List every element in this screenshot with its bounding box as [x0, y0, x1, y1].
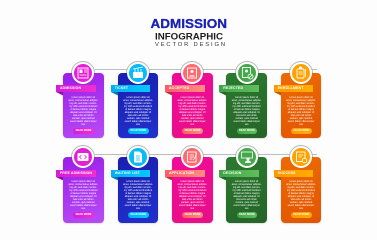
body text: Lorem ipsum dolor sit — [235, 96, 258, 99]
body text: veniam, quis nostrud — [290, 117, 312, 120]
body text: aliquam erat volutpat. Ut — [125, 195, 151, 198]
title: ADMISSION — [150, 16, 227, 31]
body text — [177, 180, 208, 210]
body text: amet, consectetuer adipisc- — [286, 99, 316, 102]
body text — [68, 96, 98, 126]
body text: sus — [190, 123, 194, 126]
body text: exerci tation ullamcorper — [288, 120, 314, 123]
panel: enrollment — [274, 61, 322, 139]
icon: decision — [235, 145, 259, 168]
ribbon label: ACCEPTED — [169, 86, 189, 90]
icon: ticket — [126, 61, 150, 84]
panel: ticket — [111, 61, 158, 139]
button: READ MORE — [293, 213, 309, 216]
body text: my nibh euismod tincidunt — [178, 189, 206, 192]
body text — [232, 96, 262, 126]
body text: aliquam erat volutpat. Ut — [233, 195, 260, 198]
body text: exerci tation ullamcorper — [233, 204, 260, 207]
body text: wisi enim ad minim — [182, 198, 203, 201]
body text: ut laoreet dolore magna — [288, 192, 314, 195]
body text: wisi enim ad minim — [73, 114, 94, 117]
ribbon label: SUCCESS — [278, 170, 296, 174]
body text: wisi enim ad minim — [128, 198, 148, 201]
body text: veniam, quis nostrud — [127, 117, 149, 120]
ribbon label — [56, 170, 96, 177]
body text: exerci tation ullamcorper — [233, 120, 260, 123]
button — [237, 212, 257, 218]
body text: veniam, quis nostrud — [235, 117, 258, 120]
icon: application — [180, 145, 204, 168]
body text: amet, consectetuer adipisc- — [232, 183, 262, 186]
button: READ MORE — [76, 213, 92, 216]
icon: accepted — [180, 61, 204, 84]
body text — [177, 96, 208, 126]
body text: wisi enim ad minim — [128, 114, 148, 117]
body text: amet, consectetuer adipisc- — [123, 183, 153, 186]
body text: my nibh euismod tincidunt — [124, 189, 152, 192]
ribbon label: REJECTED — [223, 86, 243, 90]
body text: ut laoreet dolore magna — [125, 108, 151, 111]
body text: my nibh euismod tincidunt — [287, 105, 315, 108]
panel: application — [165, 145, 214, 224]
panel: admission — [56, 61, 104, 139]
body text: ut laoreet dolore magna — [70, 108, 96, 111]
body text: exerci tation ullamcorper — [179, 204, 206, 207]
body text: Lorem ipsum dolor sit — [126, 96, 150, 99]
body text: ut laoreet dolore magna — [234, 192, 259, 195]
ribbon label: DECISION — [223, 170, 241, 174]
button — [128, 212, 149, 218]
ribbon label: WAITING LIST — [115, 170, 140, 174]
ribbon label — [165, 85, 205, 92]
body text: amet, consectetuer adipisc- — [68, 99, 98, 102]
ribbon label — [56, 85, 96, 92]
body text: my nibh euismod tincidunt — [178, 105, 206, 108]
body text: Lorem ipsum dolor sit — [72, 180, 95, 183]
ribbon label: ENROLLMENT — [278, 86, 304, 90]
body text: amet, consectetuer adipisc- — [177, 99, 207, 102]
body text: veniam, quis nostrud — [72, 117, 95, 120]
button — [291, 128, 312, 134]
body text: veniam, quis nostrud — [181, 201, 204, 204]
body text: amet, consectetuer adipisc- — [123, 99, 153, 102]
body text: wisi enim ad minim — [236, 198, 257, 201]
panel: rejected — [219, 61, 268, 139]
icon: enrollment — [289, 61, 313, 84]
body text: ut laoreet dolore magna — [125, 192, 151, 195]
ribbon label: ADMISSION — [60, 86, 81, 90]
button — [73, 128, 94, 134]
body text: ut laoreet dolore magna — [179, 108, 205, 111]
body text — [286, 96, 316, 126]
body text: ing elit, sed diam nonum- — [233, 186, 260, 189]
body text: sus — [299, 207, 303, 210]
body text: exerci tation ullamcorper — [125, 120, 151, 123]
body text: exerci tation ullamcorper — [288, 204, 314, 207]
body text: amet, consectetuer adipisc- — [68, 183, 98, 186]
body text: exerci tation ullamcorper — [70, 204, 97, 207]
button: READ MORE — [185, 129, 201, 132]
body text: wisi enim ad minim — [291, 114, 311, 117]
ribbon label — [219, 170, 259, 177]
ribbon label: TICKET — [115, 86, 128, 90]
body text: sus — [136, 207, 140, 210]
body text: ut laoreet dolore magna — [234, 108, 259, 111]
title: VECTOR DESIGN — [155, 42, 225, 48]
body text: ing elit, sed diam nonum- — [124, 186, 152, 189]
body text: my nibh euismod tincidunt — [124, 105, 152, 108]
body text: veniam, quis nostrud — [181, 117, 204, 120]
body text: exerci tation ullamcorper — [125, 204, 151, 207]
button — [128, 128, 149, 134]
body text: Lorem ipsum dolor sit — [289, 96, 313, 99]
body text: sus — [81, 207, 85, 210]
panel: waiting list — [111, 145, 158, 224]
body text: veniam, quis nostrud — [127, 201, 149, 204]
icon: admission form — [71, 61, 95, 84]
title: INFOGRAPHIC — [155, 31, 224, 41]
button: READ MORE — [76, 129, 92, 132]
ribbon label — [111, 170, 150, 177]
body text: exerci tation ullamcorper — [70, 120, 97, 123]
ribbon label — [219, 85, 259, 92]
body text: Lorem ipsum dolor sit — [126, 180, 150, 183]
body text — [232, 180, 262, 210]
body text: ut laoreet dolore magna — [179, 192, 205, 195]
body text: ing elit, sed diam nonum- — [70, 102, 97, 105]
button — [73, 212, 94, 218]
body text: sus — [190, 207, 194, 210]
body text: aliquam erat volutpat. Ut — [70, 111, 96, 114]
body text: aliquam erat volutpat. Ut — [179, 195, 206, 198]
body text: aliquam erat volutpat. Ut — [125, 111, 151, 114]
body text: amet, consectetuer adipisc- — [232, 99, 262, 102]
icon: free admission — [71, 145, 95, 168]
body text: veniam, quis nostrud — [72, 201, 95, 204]
body text: my nibh euismod tincidunt — [232, 189, 261, 192]
body text: Lorem ipsum dolor sit — [289, 180, 313, 183]
body text: amet, consectetuer adipisc- — [286, 183, 316, 186]
button: READ MORE — [185, 213, 201, 216]
body text: aliquam erat volutpat. Ut — [233, 111, 260, 114]
body text: my nibh euismod tincidunt — [69, 105, 97, 108]
body text: ing elit, sed diam nonum- — [287, 102, 315, 105]
button: READ MORE — [293, 129, 309, 132]
panel: success — [274, 145, 322, 224]
body text: wisi enim ad minim — [236, 114, 257, 117]
button — [182, 128, 203, 134]
body text: aliquam erat volutpat. Ut — [288, 111, 314, 114]
body text: ing elit, sed diam nonum- — [287, 186, 315, 189]
body text: sus — [245, 207, 248, 210]
body text: amet, consectetuer adipisc- — [177, 183, 207, 186]
body text: ing elit, sed diam nonum- — [70, 186, 97, 189]
body text — [123, 96, 153, 126]
ribbon label — [165, 170, 205, 177]
body text: Lorem ipsum dolor sit — [181, 180, 204, 183]
body text: aliquam erat volutpat. Ut — [288, 195, 314, 198]
panel: accepted — [165, 61, 214, 139]
body text: exerci tation ullamcorper — [179, 120, 206, 123]
button: READ MORE — [130, 213, 146, 216]
body text: wisi enim ad minim — [182, 114, 203, 117]
body text: ut laoreet dolore magna — [70, 192, 96, 195]
button — [291, 212, 312, 218]
body text: aliquam erat volutpat. Ut — [179, 111, 206, 114]
ribbon label — [274, 170, 313, 177]
body text: aliquam erat volutpat. Ut — [70, 195, 96, 198]
ribbon label: FREE ADMISSION — [60, 170, 92, 174]
icon: success — [289, 145, 313, 168]
body text — [68, 180, 98, 210]
body text: veniam, quis nostrud — [235, 201, 258, 204]
body text: ut laoreet dolore magna — [288, 108, 314, 111]
body text — [286, 180, 316, 210]
body text: sus — [81, 123, 85, 126]
body text: Lorem ipsum dolor sit — [72, 96, 95, 99]
button: READ MORE — [130, 129, 146, 132]
body text: ing elit, sed diam nonum- — [124, 102, 152, 105]
body text: wisi enim ad minim — [73, 198, 94, 201]
panel: free admission — [56, 145, 104, 224]
button: READ MORE — [239, 213, 255, 216]
body text: sus — [299, 123, 303, 126]
ribbon label: APPLICATION — [169, 170, 194, 174]
button: READ MORE — [239, 129, 255, 132]
body text — [123, 180, 153, 210]
panel: decision — [219, 145, 268, 224]
body text: sus — [136, 123, 140, 126]
icon: rejected — [235, 61, 259, 84]
title — [150, 16, 227, 48]
body text: ing elit, sed diam nonum- — [179, 102, 206, 105]
ribbon label — [274, 85, 313, 92]
body text: wisi enim ad minim — [291, 198, 311, 201]
body text: Lorem ipsum dolor sit — [235, 180, 258, 183]
body text: Lorem ipsum dolor sit — [181, 96, 204, 99]
body text: sus — [245, 123, 248, 126]
body text: my nibh euismod tincidunt — [232, 105, 261, 108]
body text: my nibh euismod tincidunt — [69, 189, 97, 192]
button — [182, 212, 203, 218]
icon: waiting list — [126, 145, 150, 168]
body text: ing elit, sed diam nonum- — [233, 102, 260, 105]
body text: veniam, quis nostrud — [290, 201, 312, 204]
body text: my nibh euismod tincidunt — [287, 189, 315, 192]
ribbon label — [111, 85, 150, 92]
body text: ing elit, sed diam nonum- — [179, 186, 206, 189]
button — [237, 128, 257, 134]
